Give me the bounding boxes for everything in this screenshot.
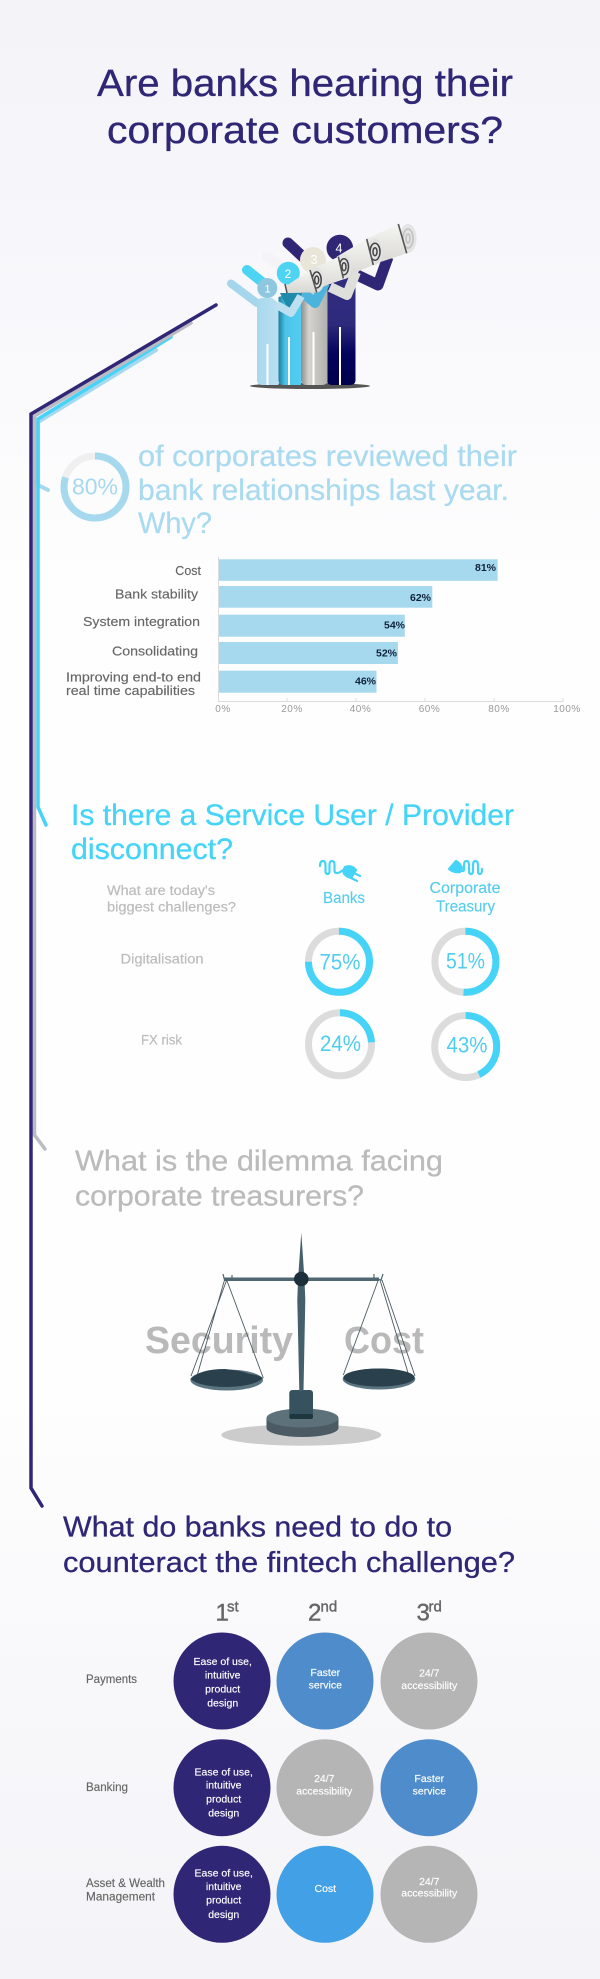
bar labels: Improving end-to end bbox=[66, 670, 201, 684]
column headers: Corporate bbox=[430, 880, 500, 897]
ranking row: asset and wealth management: Ease of use, bbox=[195, 1868, 253, 1880]
sector labels: Management bbox=[86, 1892, 156, 1904]
bar labels: System integration bbox=[83, 615, 200, 629]
title: corporate customers? bbox=[107, 110, 503, 152]
axis labels: 40% bbox=[350, 704, 371, 715]
rank headers: nd bbox=[320, 1598, 337, 1616]
donut: banks FX risk 24% bbox=[308, 1013, 372, 1076]
rank headers: 1 bbox=[216, 1600, 229, 1626]
rank headers: rd bbox=[428, 1598, 442, 1616]
row labels: FX risk bbox=[141, 1032, 182, 1047]
person 2 bbox=[247, 262, 325, 385]
donut: 80% bbox=[64, 456, 126, 518]
sector labels: Asset & Wealth bbox=[86, 1878, 165, 1890]
heading: dilemma: What is the dilemma facing bbox=[75, 1146, 443, 1178]
row labels bbox=[107, 883, 236, 1047]
ranking row: asset and wealth management: design bbox=[208, 1909, 239, 1921]
heading: dilemma: corporate treasurers? bbox=[75, 1180, 364, 1212]
axis labels: 80% bbox=[488, 704, 510, 715]
column headers: Treasury bbox=[436, 899, 495, 916]
axis labels: 100% bbox=[553, 704, 581, 715]
sector labels: Payments bbox=[86, 1674, 137, 1686]
row labels: biggest challenges? bbox=[107, 900, 236, 915]
donut: banks digitalisation 75%: 75% bbox=[320, 949, 360, 974]
ranking row: asset and wealth management: 24/7 bbox=[419, 1876, 440, 1888]
megaphone 1 bbox=[285, 268, 324, 293]
rank headers: 2 bbox=[308, 1600, 321, 1626]
heading: reviewed bank relationships bbox=[138, 440, 517, 540]
heading: fintech challenge bbox=[63, 1512, 515, 1579]
heading: reviewed bank relationships: of corporates reviewed their bbox=[138, 440, 517, 473]
person 1: 1 bbox=[264, 284, 271, 296]
ranking row: payments: service bbox=[309, 1680, 342, 1692]
right pan bbox=[343, 1280, 415, 1390]
axis labels bbox=[215, 704, 581, 715]
ranking row: banking: service bbox=[413, 1786, 446, 1798]
person 2: 2 bbox=[285, 267, 292, 281]
person 1 bbox=[231, 278, 302, 385]
bars bbox=[219, 559, 498, 693]
person 4: 4 bbox=[336, 242, 343, 256]
scale labels: Security bbox=[145, 1320, 293, 1362]
bar labels: Bank stability bbox=[115, 587, 199, 601]
ranking row: payments: design bbox=[207, 1697, 238, 1709]
heading: reviewed bank relationships: bank relationships last year. bbox=[138, 474, 509, 507]
megaphone 3 bbox=[337, 239, 383, 278]
axis labels: 0% bbox=[215, 704, 231, 715]
ranking row: banking: Ease of use, bbox=[195, 1766, 253, 1778]
ranking row: payments: 24/7 bbox=[419, 1668, 440, 1680]
ranking row: banking bbox=[174, 1739, 478, 1836]
donut: corporate FX risk 43%: 43% bbox=[446, 1032, 488, 1057]
donut: corporate digitalisation 51% bbox=[435, 931, 496, 992]
donut: corporate digitalisation 51%: 51% bbox=[446, 949, 485, 974]
person 4 bbox=[288, 235, 388, 385]
person 3: 3 bbox=[311, 253, 318, 267]
bar values bbox=[355, 562, 497, 688]
heading: reviewed bank relationships: Why? bbox=[138, 507, 212, 540]
icon: corporate treasury socket bbox=[449, 861, 482, 874]
bar labels: real time capabilities bbox=[66, 684, 195, 698]
connector lines bbox=[31, 305, 216, 1506]
axis labels: 60% bbox=[419, 704, 440, 715]
bar labels: Consolidating bbox=[112, 644, 198, 658]
bar labels: Cost bbox=[175, 564, 202, 578]
ranking row: banking: Faster bbox=[414, 1773, 445, 1785]
ranking row: banking: 24/7 bbox=[314, 1773, 335, 1785]
bar labels bbox=[66, 564, 202, 698]
panel: 80% review section bbox=[64, 440, 517, 540]
bar values: 46% bbox=[355, 676, 377, 688]
rank headers bbox=[216, 1598, 442, 1626]
title bbox=[97, 63, 513, 152]
sector labels: Banking bbox=[86, 1782, 128, 1794]
illustration: four people with megaphones bbox=[231, 224, 416, 389]
icon: banks plug bbox=[320, 861, 360, 881]
heading: fintech challenge: counteract the fintech challenge? bbox=[63, 1547, 515, 1579]
ranking row: asset and wealth management: Cost bbox=[315, 1883, 336, 1895]
ranking row: payments: intuitive bbox=[205, 1670, 241, 1682]
donut: banks digitalisation 75% bbox=[308, 931, 370, 992]
ranking row: payments: Ease of use, bbox=[194, 1656, 252, 1668]
ranking row: payments: product bbox=[205, 1683, 240, 1695]
heading: service disconnect bbox=[71, 799, 514, 866]
person 3 bbox=[267, 247, 356, 385]
title: Are banks hearing their bbox=[97, 63, 513, 105]
ranking row: banking: intuitive bbox=[206, 1780, 242, 1792]
ranking row: asset and wealth management: product bbox=[206, 1895, 241, 1907]
rank headers: st bbox=[227, 1598, 240, 1616]
scale labels: Cost bbox=[344, 1320, 424, 1362]
ranking row: banking: design bbox=[208, 1807, 239, 1819]
ranking row: payments bbox=[174, 1632, 478, 1730]
axis labels: 20% bbox=[281, 704, 303, 715]
megaphone 4 bbox=[367, 224, 416, 265]
heading: service disconnect: disconnect? bbox=[71, 833, 233, 866]
bar chart: reasons for review bbox=[66, 557, 581, 715]
bar values: 81% bbox=[475, 562, 497, 574]
ranking row: payments: accessibility bbox=[401, 1680, 458, 1692]
left pan bbox=[190, 1280, 263, 1390]
bar values: 54% bbox=[384, 620, 406, 632]
ranking row: banking: accessibility bbox=[296, 1785, 353, 1797]
rank headers: 3 bbox=[416, 1600, 430, 1626]
illustration: balance scale bbox=[190, 1232, 415, 1446]
scale labels bbox=[145, 1320, 424, 1362]
row labels: Digitalisation bbox=[120, 952, 204, 966]
bar values: 62% bbox=[410, 592, 432, 604]
heading: service disconnect: Is there a Service User / Provider bbox=[71, 799, 514, 832]
bar values: 52% bbox=[376, 648, 398, 660]
ranking row: asset and wealth management: intuitive bbox=[206, 1881, 242, 1893]
donut: 80%: 80% bbox=[72, 474, 118, 500]
donut: corporate FX risk 43% bbox=[435, 1016, 497, 1078]
heading: fintech challenge: What do banks need to do to bbox=[63, 1512, 452, 1544]
ranking row: asset and wealth management: accessibility bbox=[401, 1888, 458, 1900]
column headers: Banks bbox=[323, 890, 365, 907]
row labels: What are today's bbox=[107, 883, 215, 898]
sector labels bbox=[86, 1674, 165, 1904]
ranking row: banking: product bbox=[206, 1793, 241, 1805]
heading: dilemma bbox=[75, 1146, 443, 1212]
ground shadow bbox=[250, 383, 370, 389]
ranking row: payments: Faster bbox=[310, 1667, 341, 1679]
megaphone 2 bbox=[310, 254, 352, 291]
column headers bbox=[323, 880, 500, 916]
donut: banks FX risk 24%: 24% bbox=[320, 1031, 361, 1056]
ranking row: asset and wealth management bbox=[174, 1846, 478, 1943]
